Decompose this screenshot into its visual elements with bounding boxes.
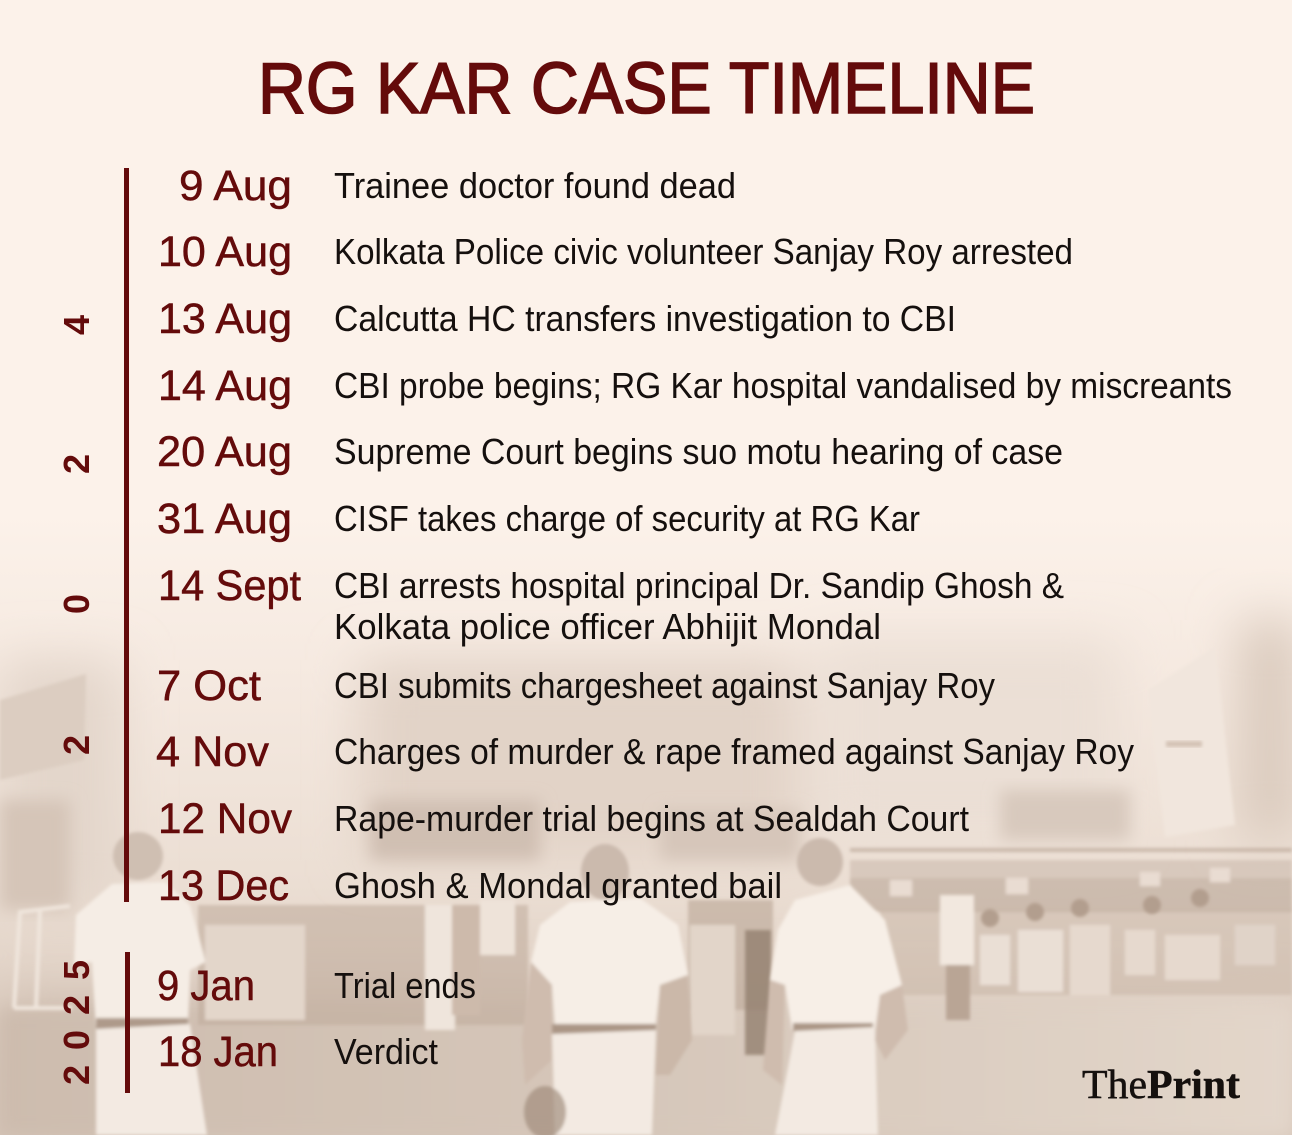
event: 14 Sept (158, 562, 1064, 647)
ground (0, 1010, 1292, 1135)
event: 9 Aug: Trainee doctor found dead (334, 165, 736, 206)
event: 12 Nov: Rape-murder trial begins at Sealdah Court (334, 798, 969, 839)
timeline bar 2024 (124, 168, 129, 902)
event: 9 Jan: Trial ends (334, 965, 476, 1006)
barricades row (850, 848, 1292, 912)
event: 4 Nov (156, 728, 1134, 776)
event: 20 Aug (157, 428, 1063, 476)
event: 14 Sept: CBI arrests hospital principal Dr. Sandip Ghosh & (334, 565, 1064, 606)
event: 9 Aug: 9 Aug (179, 162, 292, 210)
foreground officer center (522, 844, 692, 1135)
event: 18 Jan (158, 1028, 438, 1076)
event: 18 Jan: Verdict (334, 1031, 438, 1072)
event: 13 Dec (158, 862, 782, 910)
year label 2024 (56, 315, 97, 755)
event: 13 Aug (158, 295, 956, 343)
title: RG KAR CASE TIMELINE (258, 49, 1035, 129)
event: 20 Aug: Supreme Court begins suo motu hearing of case (334, 431, 1063, 472)
tree and shop details (0, 790, 1130, 910)
event: 14 Aug: CBI probe begins; RG Kar hospital vandalised by miscreants (334, 365, 1232, 406)
year label 2024: 2 (56, 735, 97, 755)
banner left (0, 674, 86, 780)
event: 31 Aug: 31 Aug (157, 495, 292, 543)
event: 14 Aug: 14 Aug (158, 362, 292, 410)
foreground officer right (763, 838, 908, 1135)
mid crowd (198, 900, 773, 1055)
foreground officer left (74, 832, 207, 1135)
event: 14 Aug (158, 362, 1232, 410)
hospital sign (1148, 647, 1235, 837)
event: 13 Dec: 13 Dec (158, 862, 289, 910)
year label 2024: 0 (56, 594, 97, 614)
event: 7 Oct (157, 662, 995, 710)
seated officers (880, 889, 1292, 1020)
year label 2025: 2025 (56, 960, 97, 1085)
barrier left (14, 906, 72, 1008)
event: 14 Sept: Kolkata police officer Abhijit Mondal (334, 606, 881, 647)
event: 31 Aug: CISF takes charge of security at RG Kar (334, 498, 920, 539)
event: 7 Oct: CBI submits chargesheet against Sanjay Roy (334, 665, 995, 706)
event: 13 Aug: Calcutta HC transfers investigation to CBI (334, 298, 956, 339)
event: 9 Aug (179, 162, 736, 210)
event: 9 Jan: 9 Jan (157, 962, 255, 1010)
logo: ThePrint: ThePrint (1082, 1061, 1240, 1107)
event: 18 Jan: 18 Jan (158, 1028, 278, 1076)
event: 9 Jan (157, 962, 476, 1010)
event: 31 Aug (157, 495, 920, 543)
year label 2024: 4 (56, 315, 97, 335)
event: 4 Nov: Charges of murder & rape framed against Sanjay Roy (334, 731, 1134, 772)
event: 10 Aug: Kolkata Police civic volunteer Sanjay Roy arrested (334, 231, 1073, 272)
event: 7 Oct: 7 Oct (157, 662, 261, 710)
event: 10 Aug (158, 228, 1073, 276)
event: 13 Aug: 13 Aug (158, 295, 292, 343)
event: 14 Sept: 14 Sept (158, 562, 301, 610)
year label 2024: 2 (56, 454, 97, 474)
event: 10 Aug: 10 Aug (158, 228, 292, 276)
event: 13 Dec: Ghosh & Mondal granted bail (334, 865, 782, 906)
timeline bar 2025 (125, 952, 130, 1093)
event: 12 Nov (158, 795, 969, 843)
event: 12 Nov: 12 Nov (158, 795, 292, 843)
event: 20 Aug: 20 Aug (157, 428, 292, 476)
event: 4 Nov: 4 Nov (156, 728, 269, 776)
